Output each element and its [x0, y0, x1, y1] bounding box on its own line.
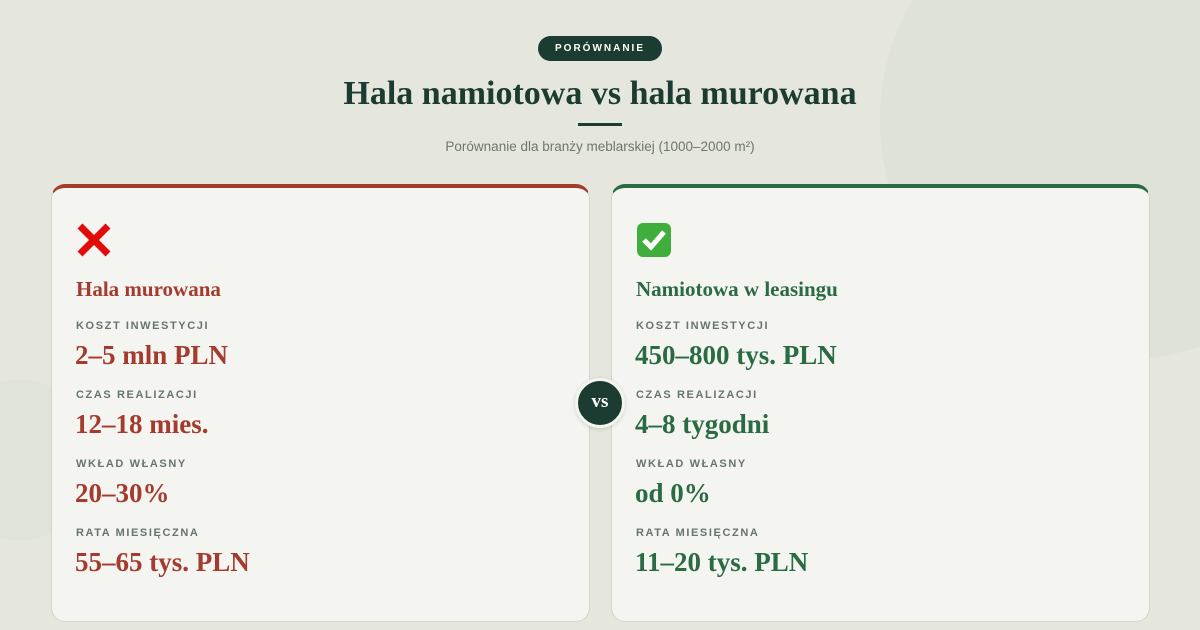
label: koszt: KOSZT INWESTYCJI [636, 320, 769, 332]
value: wkład: od 0% [635, 478, 711, 508]
value: wkład: 20–30% [75, 478, 170, 508]
icon: green check [637, 223, 671, 257]
value: koszt: 450–800 tys. PLN [635, 340, 837, 370]
label: wkład: WKŁAD WŁASNY [76, 458, 187, 470]
heading: Hala murowana [76, 277, 221, 301]
label: czas: CZAS REALIZACJI [636, 389, 758, 401]
value: rata: 55–65 tys. PLN [75, 547, 250, 577]
icon: red cross [78, 224, 110, 256]
vs badge [575, 378, 625, 428]
panel: namiotowa w leasingu [611, 184, 1150, 622]
value: czas: 12–18 mies. [75, 409, 208, 439]
label: koszt: KOSZT INWESTYCJI [76, 320, 209, 332]
badge: Porównanie: PORÓWNANIE [555, 43, 645, 54]
value: czas: 4–8 tygodni [635, 409, 769, 439]
badge: Porównanie [538, 36, 662, 61]
label: czas: CZAS REALIZACJI [76, 389, 198, 401]
value: koszt: 2–5 mln PLN [75, 340, 228, 370]
vs badge: vs [592, 391, 608, 412]
value: rata: 11–20 tys. PLN [635, 547, 808, 577]
label: rata: RATA MIESIĘCZNA [636, 527, 759, 539]
heading: Namiotowa w leasingu [636, 277, 838, 301]
label: rata: RATA MIESIĘCZNA [76, 527, 199, 539]
subtitle: Porównanie dla branży meblarskiej (1000–2000 m²) [445, 139, 755, 154]
title: Hala namiotowa vs hala murowana [343, 75, 857, 112]
label: wkład: WKŁAD WŁASNY [636, 458, 747, 470]
panel: hala murowana [51, 184, 590, 622]
